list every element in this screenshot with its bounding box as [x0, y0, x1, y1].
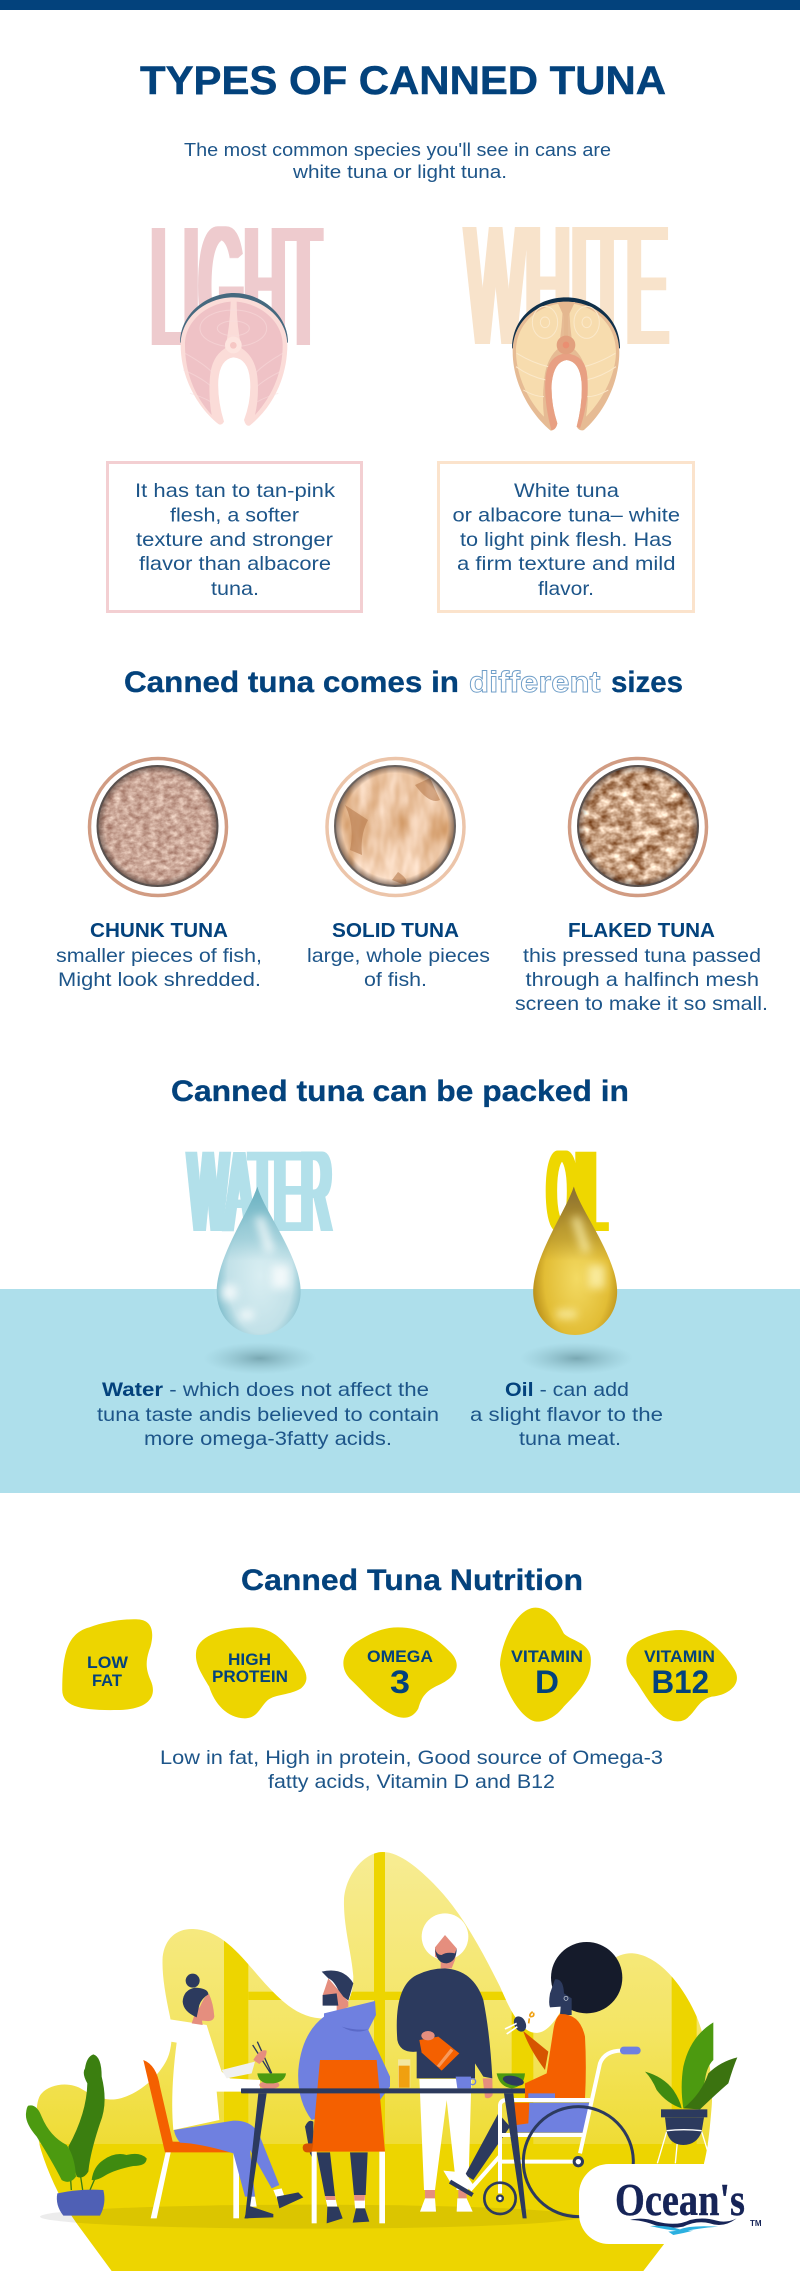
- white description box: to light pink flesh. Has: [460, 529, 672, 551]
- badge: high protein: PROTEIN: [212, 1667, 288, 1686]
- caption: flaked tuna: [515, 920, 768, 1015]
- light description box: flesh, a softer: [170, 504, 300, 526]
- standing man with pitcher: [397, 1913, 493, 2212]
- panel: light tuna: [108, 192, 362, 612]
- intro text: white tuna or light tuna.: [292, 161, 507, 182]
- badge: vitamin b12: [644, 1647, 715, 1700]
- badge: vitamin d: [511, 1647, 583, 1700]
- icon: light tuna steak: [180, 293, 288, 426]
- photo: chunk tuna: [90, 758, 226, 896]
- heading: packed in: Canned tuna can be packed in: [171, 1075, 629, 1108]
- nutrition summary: [160, 1747, 663, 1793]
- badge: low fat: LOW: [87, 1653, 129, 1672]
- blue band: [0, 1289, 800, 1493]
- light description box: tuna.: [211, 578, 259, 600]
- light description box: texture and stronger: [136, 529, 334, 551]
- logo: Ocean's: Ocean's: [615, 2174, 745, 2225]
- caption: solid tuna: of fish.: [364, 969, 427, 991]
- badge shapes: [62, 1608, 737, 1722]
- illustration: people dining: [0, 1850, 800, 2271]
- badge: high protein: [212, 1650, 288, 1686]
- badge: omega 3: 3: [390, 1664, 410, 1700]
- light description box: [108, 462, 362, 612]
- icon: white tuna steak: [512, 297, 620, 431]
- white description box: White tuna: [514, 480, 619, 502]
- white description box: or albacore tuna– white: [452, 504, 680, 526]
- badge: omega 3: [367, 1647, 433, 1700]
- water description: Water - which does not affect the: [102, 1379, 429, 1401]
- badge: vitamin b12: B12: [652, 1664, 709, 1700]
- badges: nutrition: [62, 1608, 737, 1722]
- white description box: a firm texture and mild: [457, 553, 676, 575]
- caption: flaked tuna: screen to make it so small.: [515, 993, 768, 1015]
- panel: chunk tuna: [56, 758, 262, 991]
- badge: vitamin d: VITAMIN: [511, 1647, 583, 1666]
- panel: white tuna: [438, 191, 694, 612]
- badge: low fat: FAT: [92, 1671, 123, 1690]
- caption: chunk tuna: [56, 920, 262, 991]
- caption: flaked tuna: FLAKED TUNA: [568, 920, 715, 942]
- water description: more omega-3fatty acids.: [144, 1428, 392, 1450]
- panel: flaked tuna: [515, 758, 768, 1015]
- badge: high protein: HIGH: [228, 1650, 271, 1669]
- light description box: It has tan to tan-pink: [135, 480, 335, 502]
- caption: chunk tuna: Might look shredded.: [58, 969, 261, 991]
- panel: water: [97, 1128, 439, 1450]
- top bar: [0, 0, 800, 10]
- panel: water: WATER: [189, 1128, 331, 1256]
- caption: chunk tuna: CHUNK TUNA: [90, 920, 228, 942]
- panel: oil: OIL: [548, 1128, 606, 1256]
- oil description: [470, 1379, 663, 1450]
- text: LIGHT: [151, 192, 321, 382]
- badge: vitamin d: D: [535, 1664, 559, 1700]
- intro text: The most common species you'll see in cans are: [184, 139, 611, 160]
- logo: Ocean's: TM: [750, 2219, 762, 2228]
- left plant: [26, 2054, 147, 2216]
- heading: different sizes: Canned tuna comes in: [124, 666, 459, 699]
- oil description: tuna meat.: [519, 1428, 621, 1450]
- intro text: [184, 139, 611, 182]
- logo panel: [579, 2164, 800, 2244]
- woman in wheelchair: [443, 1942, 641, 2218]
- right plant: [645, 2022, 737, 2163]
- oil description: Oil - can add: [505, 1379, 629, 1401]
- heading: different sizes: sizes: [611, 666, 683, 699]
- badge: vitamin b12: VITAMIN: [644, 1647, 715, 1666]
- caption: flaked tuna: through a halfinch mesh: [526, 969, 759, 991]
- heading: different sizes: [124, 666, 683, 699]
- panel: oil: [470, 1128, 663, 1450]
- photo: flaked tuna: [570, 758, 706, 896]
- man in hoodie: [298, 1971, 390, 2223]
- nutrition summary: Low in fat, High in protein, Good source of Omega-3: [160, 1747, 663, 1769]
- caption: solid tuna: large, whole pieces: [307, 945, 490, 967]
- water description: [97, 1379, 439, 1450]
- white description box: [438, 462, 694, 612]
- panel: solid tuna: [307, 758, 490, 991]
- oil description: a slight flavor to the: [470, 1404, 663, 1426]
- light description box: flavor than albacore: [139, 553, 331, 575]
- badge: omega 3: OMEGA: [367, 1647, 433, 1666]
- nutrition summary: fatty acids, Vitamin D and B12: [268, 1771, 555, 1793]
- caption: solid tuna: [307, 920, 490, 991]
- icon: oil drop: [520, 1187, 633, 1374]
- woman with chopsticks: [143, 1974, 303, 2218]
- heading: nutrition: Canned Tuna Nutrition: [241, 1564, 583, 1597]
- caption: chunk tuna: smaller pieces of fish,: [56, 945, 262, 967]
- caption: flaked tuna: this pressed tuna passed: [523, 945, 761, 967]
- heading: different sizes: different: [469, 666, 601, 699]
- caption: solid tuna: SOLID TUNA: [332, 920, 459, 942]
- icon: water drop: [203, 1187, 317, 1374]
- photo: solid tuna: [327, 758, 464, 896]
- water description: tuna taste andis believed to contain: [97, 1404, 439, 1426]
- badge: low fat: [87, 1653, 129, 1690]
- table: [241, 2088, 529, 2218]
- title: TYPES OF CANNED TUNA: [140, 59, 666, 103]
- white description box: flavor.: [538, 578, 594, 600]
- background shape: [0, 1850, 733, 2271]
